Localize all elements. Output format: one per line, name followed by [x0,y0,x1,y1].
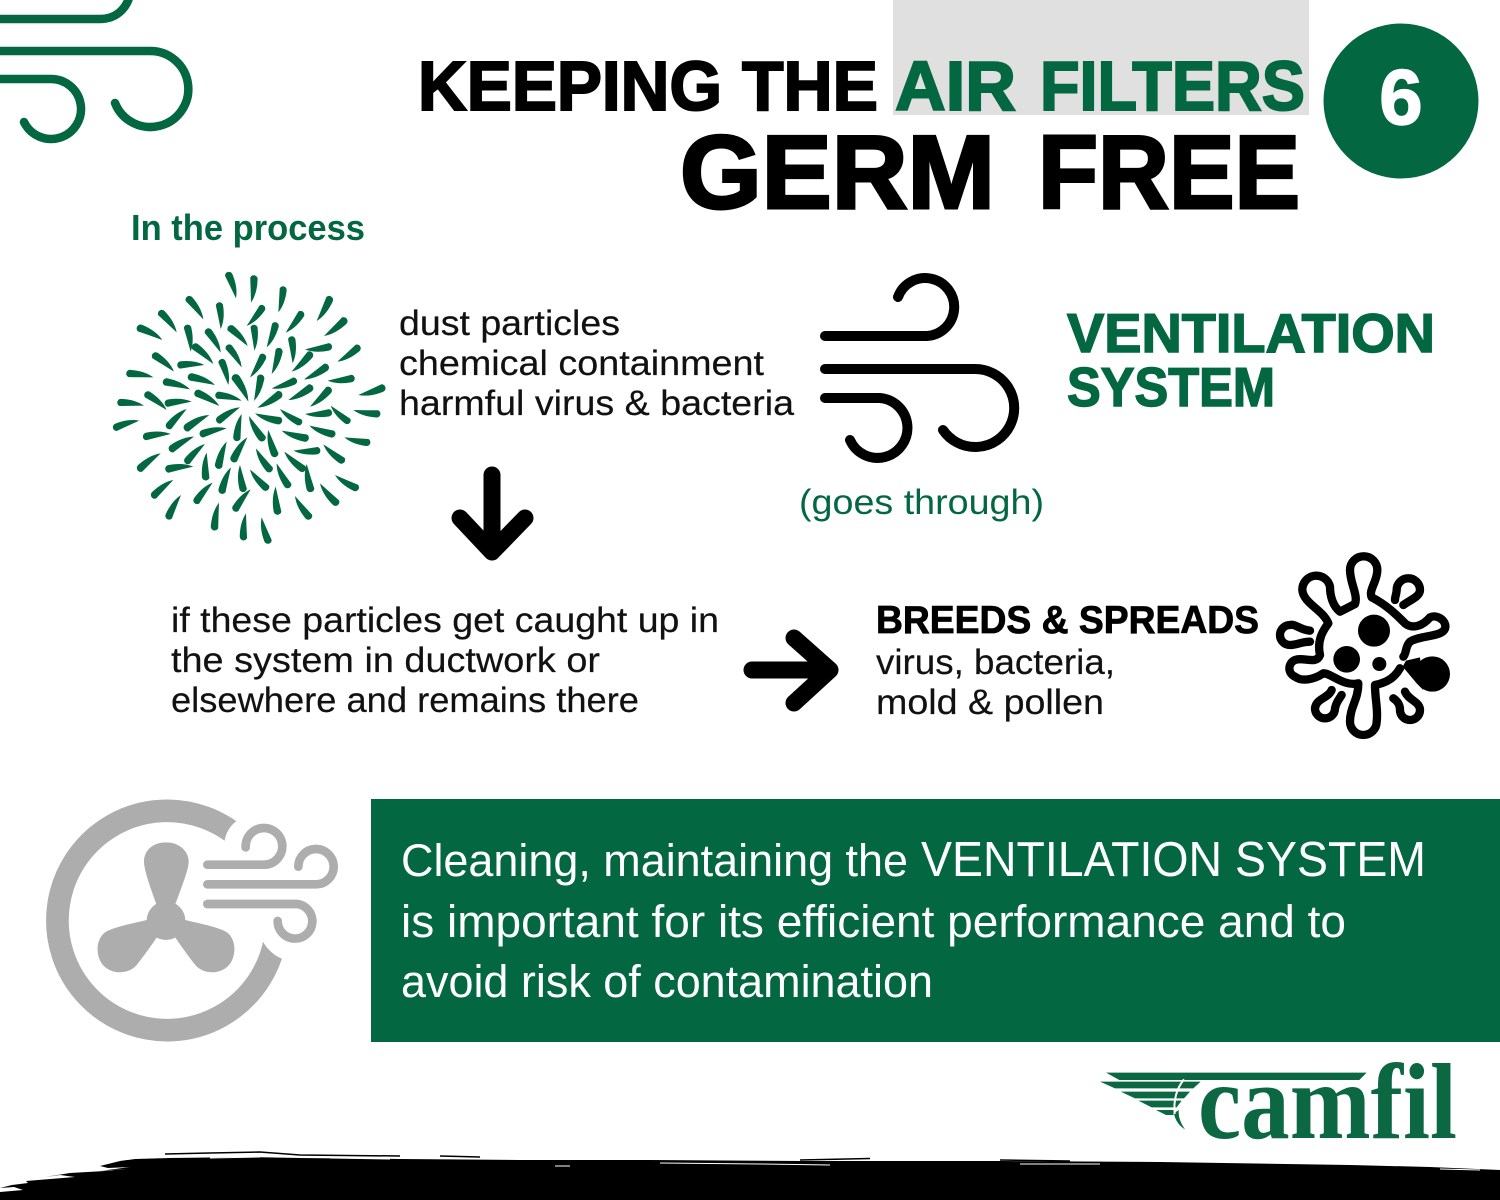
text: particles get caught: if these particles get caught up in [171,601,719,640]
text: what the process carries: chemical containment [399,344,764,383]
logo: camfil [1100,1043,1457,1162]
heading: ventilation system: SYSTEM [1067,356,1275,418]
logo: camfil: camfil [1198,1043,1457,1162]
label: goes through: (goes through) [799,483,1044,522]
title: FREE [1038,115,1300,231]
text: breeds and spreads: mold & pollen [876,683,1104,722]
subheading: in the process: In the process [131,207,365,248]
title highlight box [893,0,1309,115]
banner text: is important for its efficient performance and to [401,896,1346,947]
decorative brush stroke footer [0,1152,1500,1200]
text: breeds and spreads [876,599,1259,722]
arrow: right [752,638,830,703]
banner text: avoid risk of contamination [401,956,933,1007]
heading: ventilation system [1067,302,1435,418]
title: AIR [895,47,1016,125]
heading: ventilation system: VENTILATION [1067,302,1435,364]
text: particles get caught: elsewhere and remains there [171,681,639,720]
text: what the process carries: dust particles [399,304,620,343]
icon: wind [825,278,1014,458]
banner text [401,833,1426,1007]
text: what the process carries [399,304,795,423]
title: KEEPING [418,47,722,125]
banner text: VENTILATION SYSTEM [921,833,1426,887]
text: particles get caught [171,601,719,720]
number badge [1324,24,1478,178]
title [418,47,1305,231]
icon: corner wind swirl [0,0,188,139]
banner text: Cleaning, maintaining the [401,835,908,886]
icon: virus [1280,556,1450,735]
text: breeds and spreads: virus, bacteria, [876,643,1115,682]
icon: particle burst [112,271,387,545]
logo wing [1100,1073,1367,1129]
title: THE [742,47,878,125]
title: FILTERS [1040,47,1305,125]
number badge: 6 [1379,53,1423,141]
arrow: down [460,475,525,552]
text: particles get caught: the system in ductwork or [171,641,600,680]
title: GERM [680,115,995,231]
text: breeds and spreads: BREEDS & SPREADS [876,599,1259,642]
icon: fan with wind [57,811,335,1030]
panel: recommendation banner [371,799,1500,1042]
text: what the process carries: harmful virus & bacteria [399,384,795,423]
